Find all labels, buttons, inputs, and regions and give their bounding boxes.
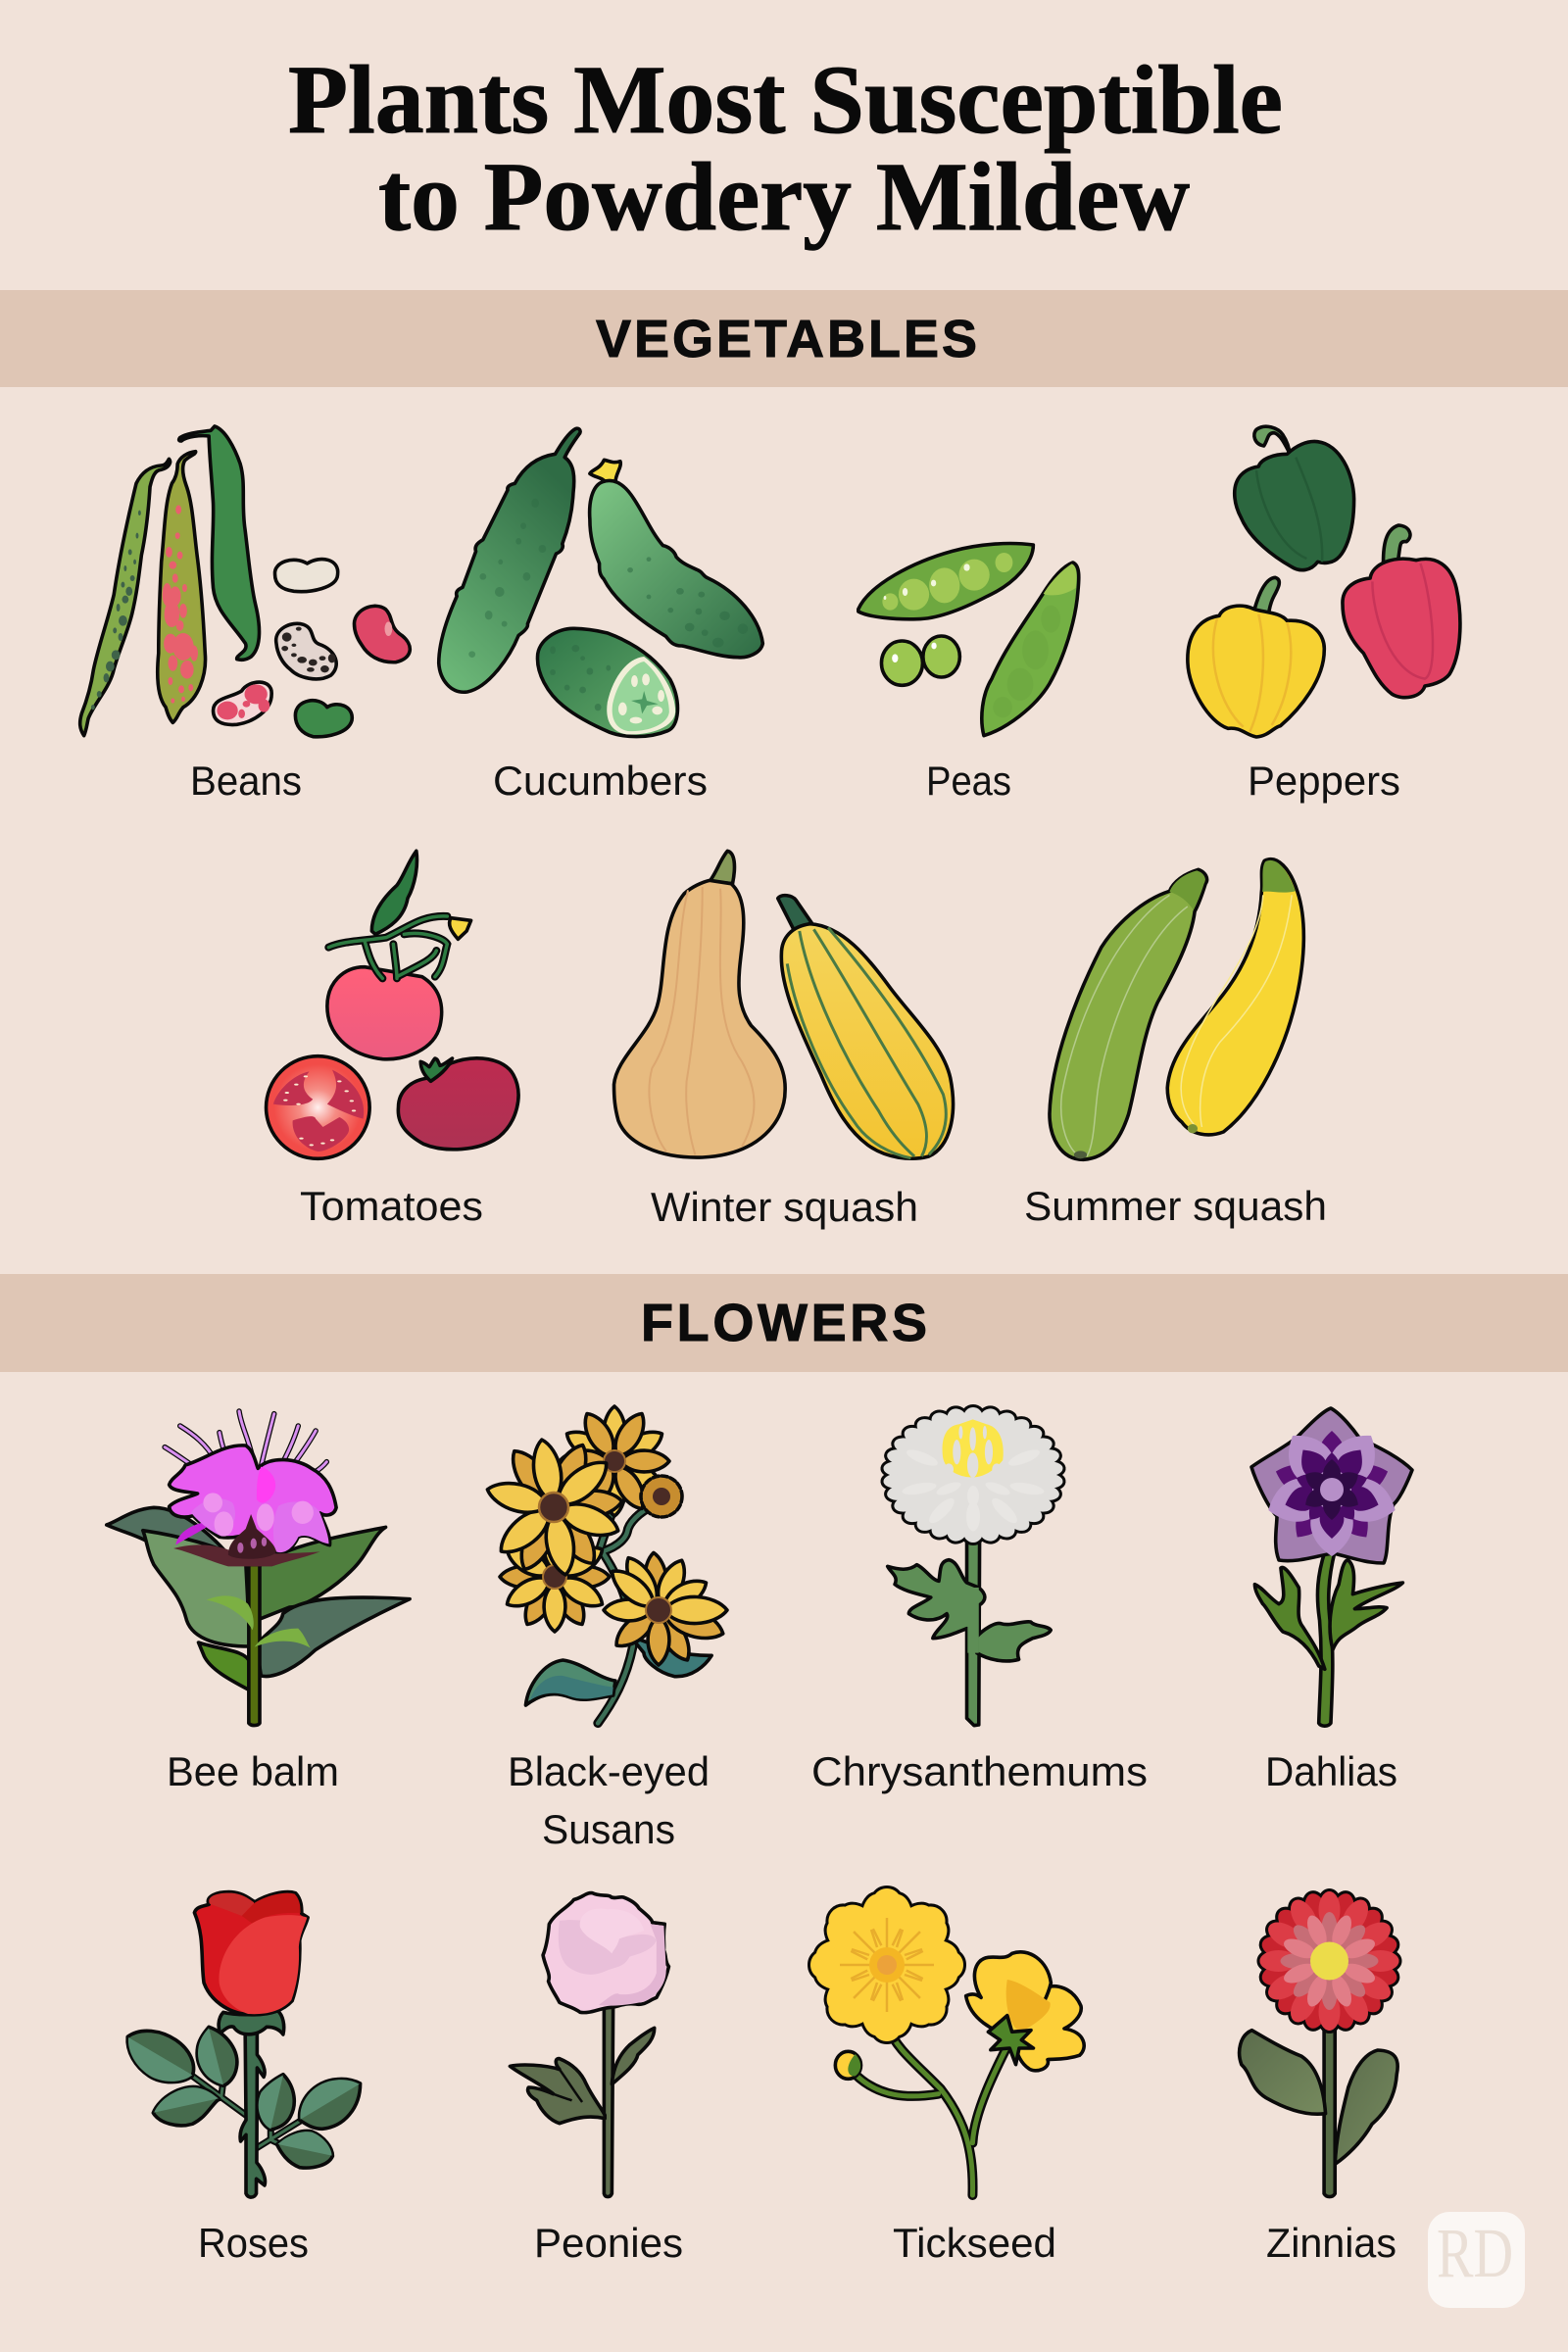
label: Tomatoes: Tomatoes bbox=[300, 1183, 483, 1229]
icon: beans bbox=[80, 426, 410, 737]
icon: tomatoes bbox=[267, 851, 518, 1158]
label: Peonies: Peonies bbox=[534, 2220, 683, 2266]
label: Beans: Beans bbox=[190, 758, 302, 804]
icon: bee balm bbox=[107, 1411, 410, 1726]
heading band: vegetables: VEGETABLES bbox=[596, 310, 977, 368]
label: Cucumbers: Cucumbers bbox=[493, 758, 708, 804]
logo badge: RD bbox=[1428, 2212, 1525, 2308]
title bbox=[288, 45, 1283, 251]
icon: dahlia bbox=[1251, 1408, 1412, 1726]
title: to Powdery Mildew bbox=[378, 142, 1190, 251]
label: Bee balm: Bee balm bbox=[167, 1748, 339, 1794]
label: Black-eyed Susans bbox=[508, 1748, 710, 1852]
icon: chrysanthemum bbox=[882, 1407, 1064, 1726]
heading band: flowers: FLOWERS bbox=[641, 1294, 927, 1352]
icon: black-eyed Susans bbox=[484, 1406, 727, 1723]
label: Peas: Peas bbox=[926, 758, 1011, 804]
label: Summer squash: Summer squash bbox=[1024, 1183, 1327, 1229]
icon: tickseed bbox=[810, 1888, 1084, 2195]
label: Black-eyed Susans: Black-eyed bbox=[508, 1748, 710, 1794]
label: Black-eyed Susans: Susans bbox=[542, 1806, 675, 1852]
icon: rose bbox=[127, 1892, 361, 2197]
logo badge: RD: RD bbox=[1437, 2214, 1513, 2292]
icon: winter squash bbox=[614, 851, 954, 1158]
label: Chrysanthemums: Chrysanthemums bbox=[811, 1748, 1148, 1794]
icon: peas bbox=[858, 544, 1079, 736]
label: Zinnias: Zinnias bbox=[1266, 2220, 1396, 2266]
title: Plants Most Susceptible bbox=[288, 45, 1283, 154]
panel: vegetables bbox=[0, 290, 1568, 1230]
label: Peppers: Peppers bbox=[1248, 758, 1400, 804]
label: Tickseed: Tickseed bbox=[893, 2220, 1056, 2266]
icon: cucumbers bbox=[439, 428, 762, 737]
heading band: flowers bbox=[0, 1274, 1568, 1372]
panel: flowers bbox=[0, 1274, 1568, 2266]
label: Dahlias: Dahlias bbox=[1265, 1748, 1397, 1794]
icon: peony bbox=[510, 1893, 668, 2197]
icon: zinnia bbox=[1240, 1876, 1414, 2197]
icon: summer squash bbox=[1050, 859, 1303, 1159]
icon: peppers bbox=[1188, 426, 1460, 737]
label: Roses: Roses bbox=[198, 2220, 309, 2266]
label: Winter squash: Winter squash bbox=[651, 1184, 918, 1230]
heading band: vegetables bbox=[0, 290, 1568, 387]
